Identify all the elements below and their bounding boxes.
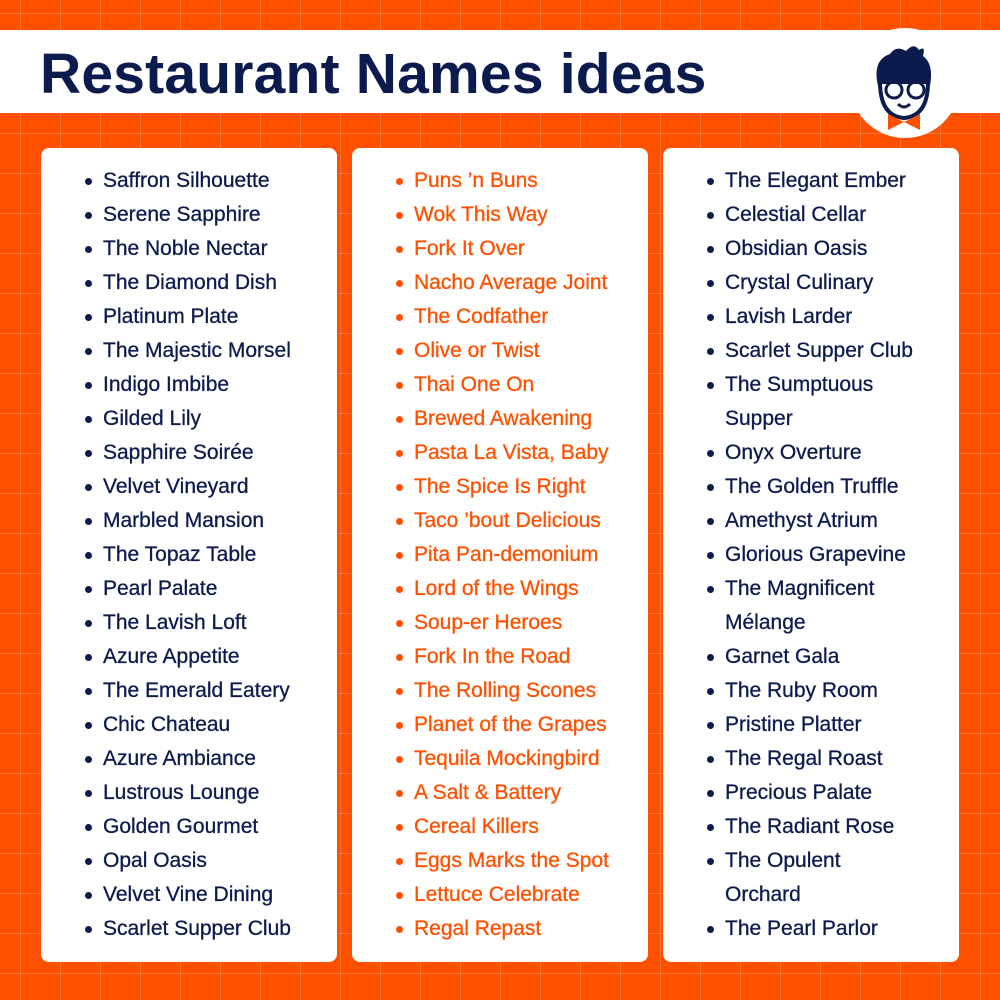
panel: column 3: Celestial Cellar <box>725 203 866 226</box>
panel: column 2: Planet of the Grapes <box>414 713 607 736</box>
panel: column 3: Obsidian Oasis <box>725 237 867 260</box>
panel: column 2: Lord of the Wings <box>414 577 579 600</box>
panel: column 1: Gilded Lily <box>103 407 201 430</box>
panel: column 2: Pasta La Vista, Baby <box>414 441 609 464</box>
panel: column 3 <box>663 148 959 962</box>
panel: column 1: Opal Oasis <box>103 849 207 872</box>
panel: column 3: Glorious Grapevine <box>725 543 906 566</box>
panel: column 1: Marbled Mansion <box>103 509 264 532</box>
panel: column 3: Garnet Gala <box>725 645 839 668</box>
panel: column 3: Mélange <box>725 611 806 634</box>
panel: column 3: The Pearl Parlor <box>725 917 878 940</box>
panel: column 1: Velvet Vine Dining <box>103 883 273 906</box>
panel: column 2: Wok This Way <box>414 203 548 226</box>
panel: column 2: Brewed Awakening <box>414 407 592 430</box>
panel: column 1: Indigo Imbibe <box>103 373 229 396</box>
panel: column 1 <box>41 148 337 962</box>
panel: column 3: Crystal Culinary <box>725 271 873 294</box>
panel: column 3: The Magnificent <box>725 577 874 600</box>
panel: column 1: The Majestic Morsel <box>103 339 291 362</box>
panel: column 3: The Opulent <box>725 849 841 872</box>
panel: column 2: The Rolling Scones <box>414 679 596 702</box>
panel: column 3: Pristine Platter <box>725 713 862 736</box>
panel: column 2: Nacho Average Joint <box>414 271 607 294</box>
panel: column 2: Olive or Twist <box>414 339 540 362</box>
panel: column 1: Azure Appetite <box>103 645 240 668</box>
panel: column 3: The Sumptuous <box>725 373 873 396</box>
panel: column 2: The Codfather <box>414 305 548 328</box>
panel: column 2: Lettuce Celebrate <box>414 883 580 906</box>
panel: column 2: Taco ’bout Delicious <box>414 509 601 532</box>
panel: column 3: Supper <box>725 407 793 430</box>
panel: column 3: The Regal Roast <box>725 747 883 770</box>
panel: column 1: Velvet Vineyard <box>103 475 249 498</box>
panel: column 1: Saffron Silhouette <box>103 169 270 192</box>
panel: column 1: Chic Chateau <box>103 713 230 736</box>
panel: column 1: The Noble Nectar <box>103 237 268 260</box>
panel: column 2: The Spice Is Right <box>414 475 586 498</box>
panel: column 1: Golden Gourmet <box>103 815 258 838</box>
panel: column 2: Regal Repast <box>414 917 541 940</box>
panel: column 3: Onyx Overture <box>725 441 862 464</box>
panel: column 2: A Salt & Battery <box>414 781 561 804</box>
panel: column 3: The Elegant Ember <box>725 169 906 192</box>
panel: column 1: Sapphire Soirée <box>103 441 254 464</box>
panel: column 1: The Emerald Eatery <box>103 679 290 702</box>
panel: column 1: Pearl Palate <box>103 577 217 600</box>
panel: column 1: Platinum Plate <box>103 305 238 328</box>
panel: column 2: Tequila Mockingbird <box>414 747 600 770</box>
panel: column 1: Lustrous Lounge <box>103 781 259 804</box>
panel: column 2: Soup-er Heroes <box>414 611 562 634</box>
panel: column 2: Pita Pan-demonium <box>414 543 598 566</box>
panel: column 1: Scarlet Supper Club <box>103 917 291 940</box>
panel: column 2: Eggs Marks the Spot <box>414 849 609 872</box>
panel: column 2 <box>352 148 648 962</box>
panel: column 3: The Radiant Rose <box>725 815 894 838</box>
panel: column 3: Scarlet Supper Club <box>725 339 913 362</box>
panel: column 3: Lavish Larder <box>725 305 852 328</box>
panel: column 3: The Ruby Room <box>725 679 878 702</box>
panel: column 2: Fork In the Road <box>414 645 570 668</box>
panel: column 2: Cereal Killers <box>414 815 539 838</box>
panel: column 2: Thai One On <box>414 373 534 396</box>
panel: column 1: Serene Sapphire <box>103 203 261 226</box>
panel: column 1: Azure Ambiance <box>103 747 256 770</box>
panel: column 1: The Lavish Loft <box>103 611 247 634</box>
panel: column 2: Fork It Over <box>414 237 525 260</box>
panel: column 3: Orchard <box>725 883 801 906</box>
panel: column 3: Precious Palate <box>725 781 872 804</box>
panel: column 1: The Diamond Dish <box>103 271 277 294</box>
panel: column 3: The Golden Truffle <box>725 475 899 498</box>
icon: nerd mascot <box>876 46 932 130</box>
title: Restaurant Names ideas <box>40 42 707 106</box>
panel: column 2: Puns ’n Buns <box>414 169 538 192</box>
panel: column 3: Amethyst Atrium <box>725 509 878 532</box>
panel: column 1: The Topaz Table <box>103 543 256 566</box>
